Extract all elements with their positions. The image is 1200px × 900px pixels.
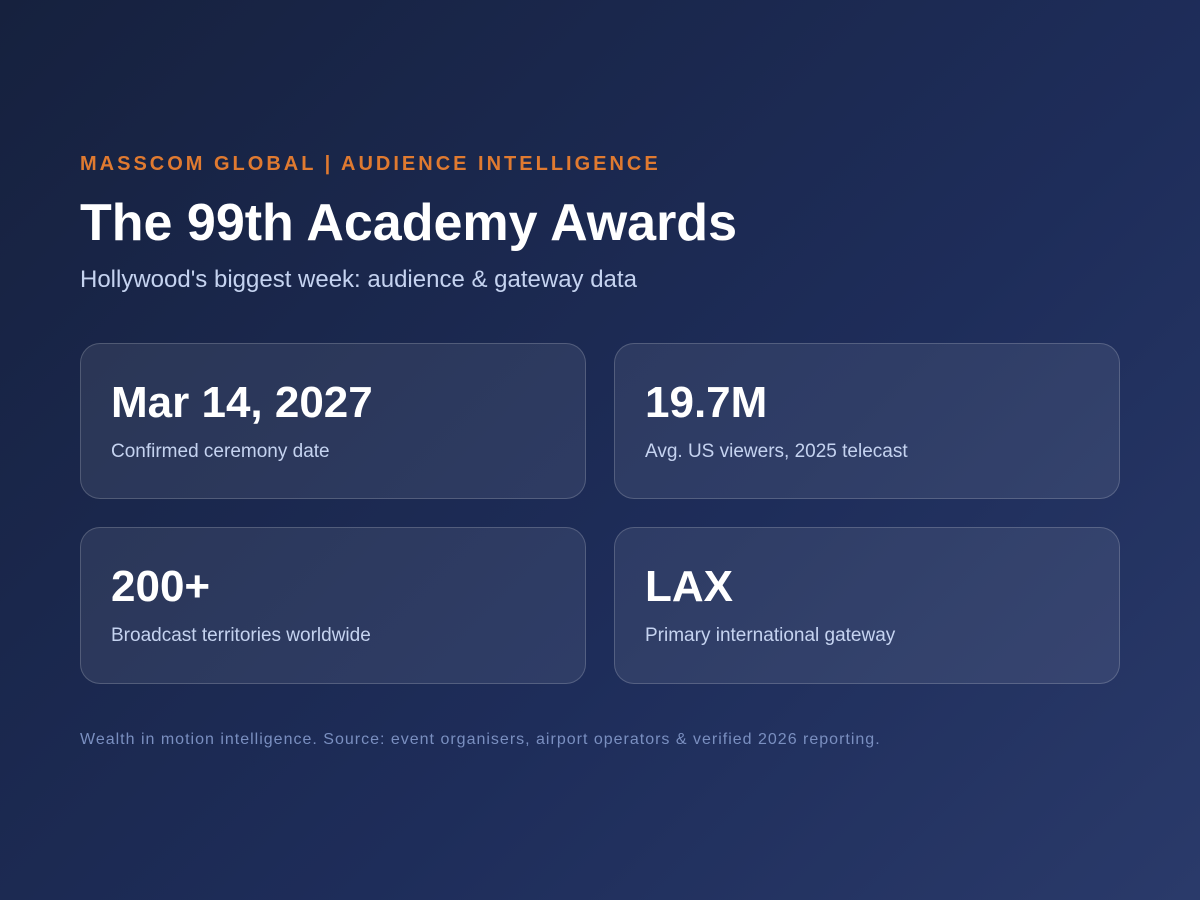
stat label: gateway: Primary international gateway: [645, 625, 895, 646]
panel: viewers: [614, 343, 1120, 499]
stat value: gateway: LAX: [645, 562, 733, 611]
stat label: viewers: Avg. US viewers, 2025 telecast: [645, 441, 908, 462]
stat label: date: Confirmed ceremony date: [111, 441, 330, 462]
stat value: viewers: 19.7M: [645, 378, 767, 427]
footer source note: Wealth in motion intelligence. Source: event organisers, airport operators & verified 2026 reporting.: [80, 731, 881, 748]
panel: ceremony date: [80, 343, 586, 499]
panel: territories: [80, 527, 586, 684]
eyebrow heading: MASSCOM GLOBAL | AUDIENCE INTELLIGENCE: [80, 153, 661, 175]
stat value: date: Mar 14, 2027: [111, 378, 373, 427]
stat value: territories: 200+: [111, 562, 210, 611]
stat label: territories: Broadcast territories worldwide: [111, 625, 371, 646]
subtitle: Hollywood's biggest week: audience & gateway data: [80, 266, 637, 293]
panel: gateway: [614, 527, 1120, 684]
title: The 99th Academy Awards: [80, 194, 737, 252]
